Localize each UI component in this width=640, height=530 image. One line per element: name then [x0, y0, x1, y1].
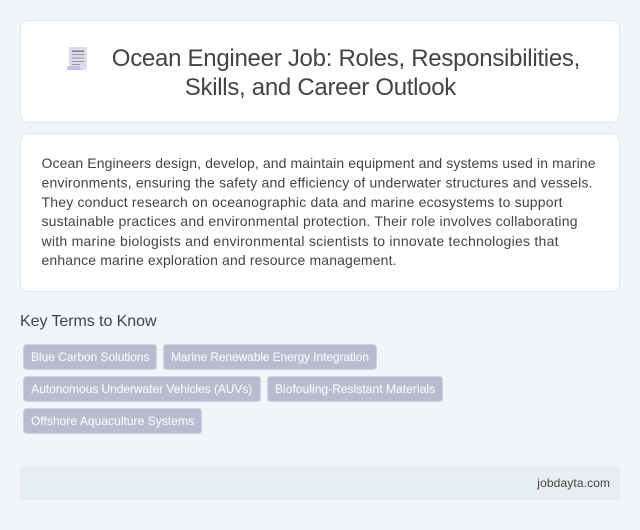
- panel: title card: [20, 20, 620, 122]
- tag: marine renewable: Marine Renewable Energy Integration: [171, 350, 369, 364]
- tag: blue carbon: [24, 344, 156, 370]
- description text: Ocean Engineers design, develop, and maintain equipment and systems used in marine: [42, 155, 596, 171]
- tag: marine renewable: [164, 344, 376, 370]
- footer source text: jobdayta.com: [536, 476, 610, 490]
- panel: description: [20, 134, 620, 292]
- footer: [20, 466, 620, 500]
- title: [112, 45, 580, 101]
- tag list: [24, 344, 442, 434]
- tag: biofouling: [268, 376, 442, 402]
- description text: enhance marine exploration and resource management.: [42, 252, 396, 268]
- icon: document scroll: [67, 47, 87, 70]
- description text: with marine biologists and environmental scientists to innovate technologies that: [40, 233, 559, 249]
- tag: AUVs: [24, 376, 260, 402]
- description text: They conduct research on oceanographic data and marine ecosystems to support: [42, 194, 563, 210]
- description text: [40, 155, 596, 268]
- tag: AUVs: Autonomous Underwater Vehicles (AUVs): [31, 382, 252, 396]
- description text: environments, ensuring the safety and efficiency of underwater structures and vessels.: [42, 174, 592, 190]
- tag: aquaculture: [24, 408, 202, 434]
- tag: blue carbon: Blue Carbon Solutions: [31, 350, 150, 364]
- title: Ocean Engineer Job: Roles, Responsibilities,: [112, 45, 580, 72]
- tag: biofouling: Biofouling-Resistant Materials: [275, 382, 435, 396]
- tag: aquaculture: Offshore Aquaculture Systems: [31, 414, 194, 428]
- description text: sustainable practices and environmental protection. Their role involves collaborating: [42, 213, 578, 229]
- heading: key terms: Key Terms to Know: [20, 313, 157, 330]
- title: Skills, and Career Outlook: [185, 74, 457, 101]
